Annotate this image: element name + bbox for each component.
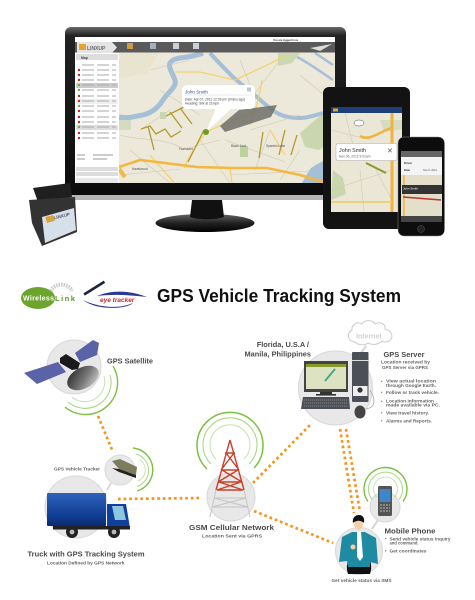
- app sidebar: Map: [81, 56, 88, 60]
- truck cab: [107, 504, 130, 528]
- app header bar: LINXUP: [87, 46, 106, 52]
- label: truck: Truck with GPS Tracking System: [28, 550, 144, 558]
- label: SMS: Get vehicle status via SMS: [332, 578, 392, 583]
- keyboard: [301, 397, 350, 409]
- label: GSM network: Location Sent via GPRS: [202, 534, 262, 538]
- truck wheels: [66, 526, 78, 538]
- node: person: [336, 515, 382, 574]
- label: GSM network: [189, 523, 274, 538]
- node: GPS server: [298, 346, 374, 425]
- text block: mobile phone: Send vehicle status inquiry: [390, 536, 451, 542]
- logo: Wireless Link: Wireless: [23, 296, 54, 302]
- label: location: Manila, Philippines: [244, 350, 311, 358]
- label: GSM network: GSM Cellular Network: [189, 523, 274, 532]
- text block: GPS server: View actual location: [386, 378, 437, 384]
- text block: mobile phone: [384, 526, 451, 554]
- logo: eye tracker: eye tracker: [100, 297, 135, 304]
- tower: [210, 440, 250, 517]
- text block: GPS server: Location information: [386, 398, 435, 404]
- node: GPS satellite: [24, 340, 118, 414]
- tablet screen: [331, 107, 402, 212]
- monitor stand: [156, 200, 254, 232]
- text block: GPS server: GPS Server: [384, 350, 425, 359]
- map popup: John Smith: [185, 90, 208, 94]
- text block: mobile phone: •: [385, 536, 387, 542]
- person figure: [339, 515, 378, 574]
- PC tower: [352, 352, 368, 402]
- truck box: [47, 493, 106, 526]
- tablet popup: [336, 144, 397, 160]
- text block: GPS server: GPS Server via GPRS: [382, 365, 428, 370]
- monitor frame: [65, 27, 346, 200]
- cloud: Internet: Internet: [356, 334, 382, 340]
- monitor screen map: Black Jack: [231, 144, 247, 148]
- text block: GPS server: •: [381, 418, 383, 424]
- label: GPS satellite: GPS Satellite: [107, 358, 153, 366]
- label: truck: Location Defined by GPS Network: [47, 560, 125, 566]
- mouse: [354, 406, 366, 418]
- text block: GPS server: Location received by: [381, 360, 431, 364]
- text block: GPS server: View travel history.: [386, 410, 429, 416]
- satellite solar panels: [24, 362, 66, 384]
- text block: GPS server: •: [381, 379, 383, 384]
- text block: mobile phone: and command.: [390, 540, 418, 546]
- node: mobile phone: [364, 468, 407, 529]
- text block: GPS server: •: [381, 390, 383, 395]
- text block: GPS server: •: [381, 399, 383, 404]
- phone screen: Nov 8, 2012: [423, 168, 438, 172]
- text block: GPS server: [381, 350, 440, 424]
- text block: GPS server: through Google Earth.: [386, 383, 436, 388]
- computer monitor: [304, 361, 348, 396]
- phone screen: [401, 151, 442, 222]
- node: GPS vehicle tracker: [105, 448, 153, 491]
- text block: GPS server: made available via PC.: [386, 402, 440, 408]
- tablet popup: ✕: [387, 148, 393, 155]
- signal waves: [65, 366, 118, 414]
- map popup: Date: Apr 07, 2011 12:09 pm (0mins ago): [185, 98, 245, 102]
- text block: GPS server: Alarms and Reports.: [386, 418, 432, 424]
- OBD tracker device: [29, 183, 77, 246]
- text block: mobile phone: Mobile Phone: [384, 526, 436, 536]
- text block: GPS server: Follow or track vehicle.: [386, 390, 439, 395]
- app header bar: [75, 37, 335, 53]
- tablet popup: John Smith: [339, 148, 366, 154]
- text block: mobile phone: Get coordinates: [390, 548, 427, 554]
- connection lines: [98, 416, 360, 543]
- monitor: [65, 27, 346, 232]
- label: location: Florida, U.S.A /: [257, 340, 309, 349]
- logo: Wireless Link: Link: [55, 294, 76, 303]
- text block: mobile phone: •: [385, 548, 387, 554]
- cloud: Internet: [348, 321, 392, 345]
- map popup: [182, 85, 255, 132]
- OBD tracker device: LINXUP: [53, 212, 70, 220]
- title: GPS Vehicle Tracking System: [157, 285, 401, 306]
- label: GPS vehicle tracker: GPS Vehicle Tracker: [54, 466, 100, 472]
- node: truck: [45, 476, 130, 538]
- phone screen: Driver: [404, 161, 413, 165]
- satellite body: [60, 354, 80, 370]
- tablet popup: Nov 06, 2012 9:02am: [339, 154, 371, 158]
- phone screen: Date: [404, 168, 411, 172]
- monitor screen map: Hazelwood: [132, 167, 148, 171]
- logo: eye tracker: [83, 281, 147, 308]
- tablet: [323, 87, 410, 229]
- app header bar: You are logged in as: [273, 38, 299, 42]
- satellite dish: [63, 361, 103, 395]
- app sidebar: [75, 53, 119, 183]
- phone: [398, 137, 444, 236]
- monitor screen map: Florissant: [179, 147, 193, 151]
- monitor screen map: Spanish Lake: [266, 144, 286, 148]
- map popup: Heading: SW at 21mph: [185, 102, 219, 106]
- phone screen: John Smith: [403, 186, 418, 190]
- text block: GPS server: •: [381, 410, 383, 416]
- monitor screen map: [75, 37, 335, 183]
- label: truck: [28, 550, 144, 566]
- node: GSM cell tower: [197, 412, 263, 521]
- logo: Wireless Link: [21, 285, 76, 309]
- label: location: [244, 340, 311, 358]
